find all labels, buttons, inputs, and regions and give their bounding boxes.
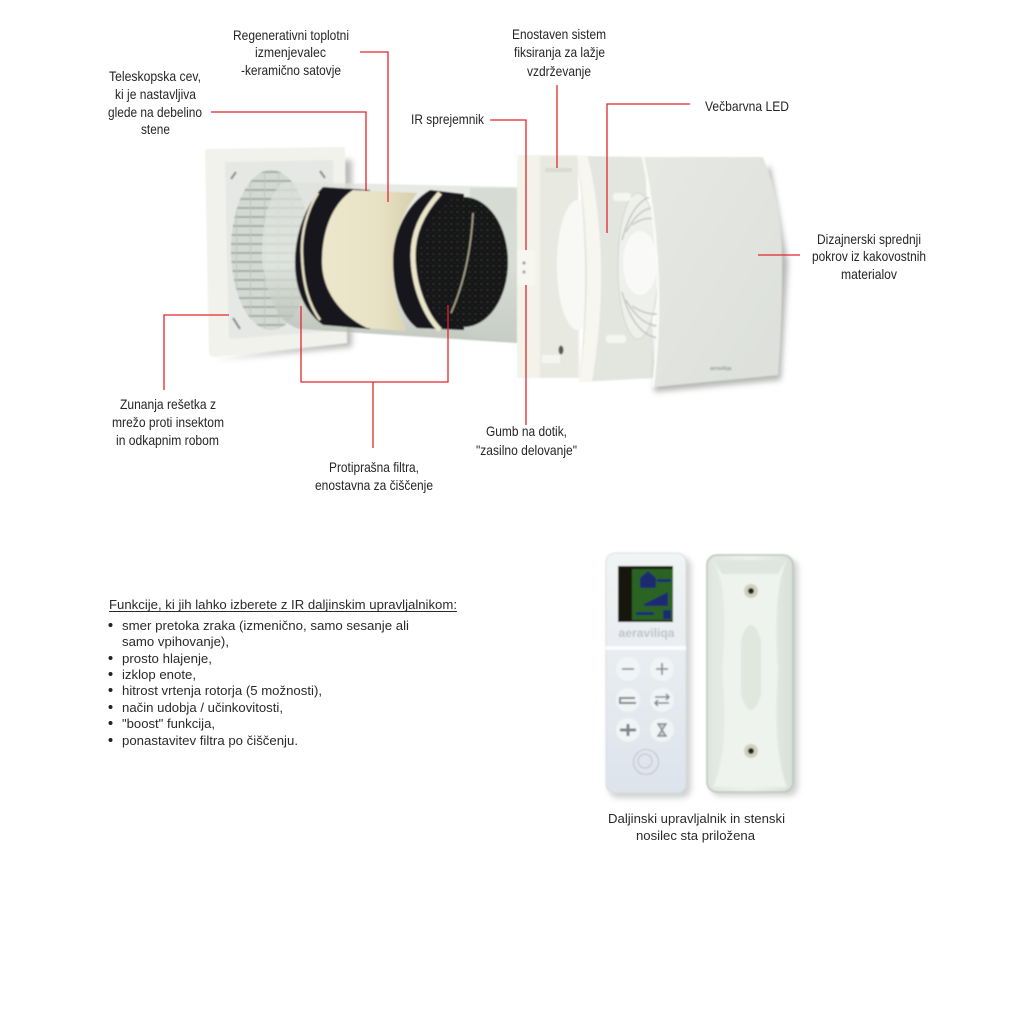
inner mounting plate bbox=[517, 155, 599, 378]
list items bbox=[122, 618, 409, 748]
label: touch button: "zasilno delovanje" bbox=[476, 443, 577, 458]
label: dust filters: Protiprašna filtra, bbox=[329, 460, 419, 475]
label: heat exchanger: Regenerativni toplotni bbox=[233, 28, 349, 43]
list items: "boost" funkcija, bbox=[122, 716, 215, 731]
front dust filter bbox=[393, 190, 508, 330]
list items: izklop enote, bbox=[122, 667, 196, 682]
label: front cover: pokrov iz kakovostnih bbox=[812, 249, 926, 264]
wall holder bbox=[707, 555, 798, 796]
label: heat exchanger bbox=[233, 28, 349, 78]
label: telescopic tube: glede na debelino bbox=[108, 105, 202, 120]
list bullets bbox=[108, 623, 112, 742]
label: simple fixing system: fiksiranja za lažje bbox=[514, 45, 605, 60]
label: touch button bbox=[476, 424, 577, 458]
remote screen bbox=[618, 566, 673, 622]
ventilation unit exploded view bbox=[205, 147, 788, 392]
label: front cover bbox=[812, 232, 926, 282]
label: simple fixing system: vzdrževanje bbox=[527, 64, 591, 79]
label: simple fixing system bbox=[512, 27, 606, 79]
designer front cover: aeraviliqa bbox=[710, 366, 732, 372]
remote buttons bbox=[616, 657, 674, 774]
label: outer grille bbox=[112, 397, 224, 448]
remote logo: aeraviliqa bbox=[618, 626, 675, 640]
list items: hitrost vrtenja rotorja (5 možnosti), bbox=[122, 683, 322, 698]
label: dust filters bbox=[315, 460, 433, 493]
remote caption: Daljinski upravljalnik in stenski bbox=[608, 811, 785, 826]
label: dust filters: enostavna za čiščenje bbox=[315, 478, 433, 493]
label: telescopic tube: ki je nastavljiva bbox=[115, 87, 196, 102]
label: heat exchanger: -keramično satovje bbox=[241, 63, 341, 78]
label: heat exchanger: izmenjevalec bbox=[255, 45, 326, 60]
list items: ponastavitev filtra po čiščenju. bbox=[122, 733, 298, 748]
label: front cover: Dizajnerski sprednji bbox=[817, 232, 921, 247]
remote caption: nosilec sta priložena bbox=[636, 828, 756, 843]
label: telescopic tube: stene bbox=[141, 122, 170, 137]
list items: smer pretoka zraka (izmenično, samo sesanje ali bbox=[122, 618, 409, 633]
designer front cover bbox=[643, 157, 788, 392]
intermediate plate with fan bbox=[577, 156, 658, 382]
label: outer grille: in odkapnim robom bbox=[116, 433, 219, 448]
IR remote control bbox=[606, 553, 691, 798]
label: outer grille: mrežo proti insektom bbox=[112, 415, 224, 430]
list heading: Funkcije, ki jih lahko izberete z IR daljinskim upravljalnikom: bbox=[109, 597, 457, 612]
ceramic honeycomb heat exchanger bbox=[322, 190, 417, 331]
list items: samo vpihovanje), bbox=[122, 634, 229, 649]
rear dust filter bbox=[295, 187, 370, 329]
label: outer grille: Zunanja rešetka z bbox=[120, 397, 216, 412]
list items: način udobja / učinkovitosti, bbox=[122, 700, 283, 715]
remote caption bbox=[608, 811, 785, 843]
label: front cover: materialov bbox=[841, 267, 897, 282]
label: simple fixing system: Enostaven sistem bbox=[512, 27, 606, 42]
label: telescopic tube bbox=[108, 69, 202, 137]
functions list bbox=[108, 597, 457, 748]
label: touch button: Gumb na dotik, bbox=[486, 424, 567, 439]
telescopic tube bbox=[262, 182, 517, 343]
leader lines bbox=[164, 52, 800, 448]
outer wall grille bbox=[205, 147, 352, 360]
list items: prosto hlajenje, bbox=[122, 651, 212, 666]
label: telescopic tube: Teleskopska cev, bbox=[109, 69, 201, 84]
label: multicolour LED: Večbarvna LED bbox=[705, 99, 789, 114]
label: IR receiver: IR sprejemnik bbox=[411, 112, 484, 127]
